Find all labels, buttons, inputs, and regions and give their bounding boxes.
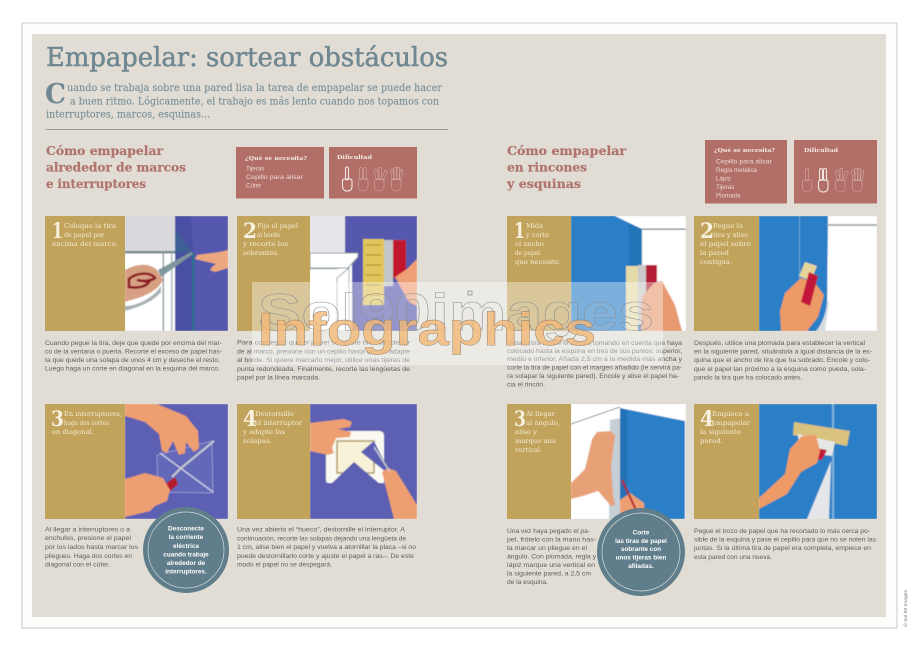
step 4 right: gold label: pared. — [700, 437, 723, 445]
step 1 left: gold label: Coloque la tira — [64, 222, 116, 230]
step 2 left: gold label — [237, 216, 310, 331]
body text step 3 right: la siguiente pared, a 2,5 cm — [507, 570, 591, 578]
intro text — [45, 79, 443, 120]
watermark: Sol90images / Infographics: Sol90images — [258, 284, 654, 342]
body text step 3 right: ta marcar un pliegue en el — [507, 545, 587, 552]
step 2 right: gold label: 2 — [700, 218, 714, 243]
step 1 right: gold label: que necesite. — [515, 258, 561, 266]
box: qué se necesita, izquierda: Cúter — [246, 182, 261, 190]
step 4 left: gold label: solapas. — [243, 437, 272, 445]
step 4 left: gold label — [237, 404, 310, 519]
body text step 2 left: Para conseguir que el papel se ajuste bien alrededor — [237, 340, 411, 346]
intro text: interruptores, marcos, esquinas... — [46, 108, 210, 120]
body text step 3 right — [507, 528, 597, 586]
body text step 4 left: continuación, recorte las solapas dejando una lengüeta de — [237, 536, 406, 542]
step 2 left: gold label: al borde — [257, 231, 280, 239]
drop cap: C — [45, 79, 66, 110]
heading: rincones y esquinas: en rincones — [507, 160, 587, 174]
body text step 2 right: quina que el ancho de tira que ha sobrado. Encole y colo- — [694, 357, 870, 364]
heading: marcos e interruptores — [46, 143, 186, 191]
body text step 2 left: papel por la línea marcada. — [237, 374, 320, 382]
step 3 left: gold label: en diagonal. — [52, 428, 94, 436]
box: dificultad, izquierda — [329, 147, 417, 198]
body text step 1 right: corte la tira de papel con el margen añadido (le servirá pa- — [507, 364, 682, 372]
step 3 right: gold label: al ángulo, — [526, 419, 560, 427]
body text step 2 left: al borde. Si quiere marcarlo mejor, utilice unas tijeras de — [237, 357, 410, 364]
step 2 right: gold label: Pegue la — [713, 222, 743, 230]
body text step 3 right: Una vez haya pegado el pa- — [507, 528, 590, 535]
illustration: brush on blue wallpaper in corner — [571, 216, 686, 331]
body text step 1 right: ra solapar la siguiente pared). Encole y alise el papel ha- — [507, 373, 679, 380]
step 4 right: gold label: empapelar — [712, 419, 751, 427]
body text step 2 right: que el papel tan próximo a la esquina como pueda, sola- — [694, 366, 866, 373]
illustration: cutting paper over frame with scissors — [125, 216, 228, 331]
body text step 2 left: de al marco, presione con un cepillo hasta que se adapte — [237, 348, 410, 356]
step 4 left: gold label: el interruptor — [255, 419, 303, 427]
body text step 1 right: colocado hasta la esquina en tres de sus puntos: superior, — [507, 348, 682, 355]
step 2 left: gold label: Fije el papel — [257, 222, 298, 230]
body text step 4 right: sible de la esquina y pase el cepillo para que no se noten las — [694, 536, 876, 544]
step 1 right: gold label: y corte — [525, 231, 549, 239]
step 1 left: gold label: 1 — [52, 218, 63, 243]
step 1 right: gold label: Mida — [526, 222, 543, 230]
icon: hands difficulty 1 of 4 — [342, 167, 403, 191]
body text step 1 right: Mida la tira desde el rincón, tomando en cuenta que haya — [507, 340, 682, 347]
step 3 left: gold label: En interruptores, — [64, 410, 122, 418]
step 1 right: gold label — [507, 216, 571, 331]
illustration: starting next wall with brush — [759, 404, 877, 519]
heading: rincones y esquinas: y esquinas — [506, 176, 581, 191]
step 3 right: gold label: 3 — [514, 406, 526, 431]
body text step 3 right: pel, frótelo con la mano has- — [507, 536, 596, 544]
body text step 1 left: Cuando pegue la tira, deje que quede por encima del mar- — [45, 340, 222, 347]
step 2 right: gold label: la pared — [700, 249, 730, 257]
step 2 left: gold label: y recorte los — [242, 240, 289, 248]
title: Empapelar: sortear obstáculos — [46, 42, 448, 73]
callout: desconecte la corriente: cuando trabaje — [163, 552, 209, 558]
body text step 3 left — [45, 526, 138, 568]
step 3 right: gold label: alise y — [515, 428, 537, 436]
callout: corte las tiras — [597, 508, 685, 596]
body text step 2 right: Después, utilice una plomada para establecer la vertical — [694, 340, 865, 347]
body text step 2 left — [237, 340, 411, 382]
step 1 left: gold label: encima del marco. — [52, 240, 118, 248]
icon: hands difficulty 2 of 4 — [802, 168, 864, 192]
step 3 left: gold label: haga dos cortes — [64, 419, 110, 427]
box: qué se necesita, derecha: ¿Qué se necesita? — [714, 147, 775, 154]
box: qué se necesita, derecha: Cepillo para alisar — [716, 158, 772, 166]
intro text: a buen ritmo. Lógicamente, el trabajo es más lento cuando nos topamos con — [70, 96, 439, 108]
step 3 left: gold label: 3 — [51, 406, 64, 431]
heading: marcos e interruptores: Cómo empapelar — [46, 143, 163, 158]
step 2 right: gold label: el papel sobre — [700, 240, 751, 248]
illustration: diagonal cuts in switch area — [125, 404, 228, 519]
body text step 1 right: medio e inferior. Añada 2,5 cm a la medida más ancha y — [507, 356, 683, 363]
body text step 3 left: diagonal con el cúter. — [45, 562, 110, 568]
heading: rincones y esquinas: Cómo empapelar — [507, 143, 626, 158]
step 2 right: gold label: contigua. — [700, 258, 732, 266]
box: qué se necesita, izquierda: Tijeras — [246, 166, 264, 172]
body text step 4 left: puede destornillarlo corte y ajuste el papel a ras–. De este — [237, 553, 414, 560]
step 3 right: gold label: Al llegar — [525, 410, 556, 418]
box: qué se necesita, derecha: Lápiz — [716, 176, 731, 182]
callout: corte las tiras: sobrante con — [621, 546, 661, 553]
box: dificultad, derecha — [794, 140, 877, 204]
callout: corte las tiras: las tiras de papel — [615, 538, 667, 545]
step 1 right: gold label: de papel — [515, 249, 540, 257]
step 1 left: gold label: de papel por — [64, 231, 105, 239]
illustration: unscrewing switch plate and adapting flaps — [310, 404, 417, 519]
box: qué se necesita, izquierda: Cepillo para alisar — [246, 174, 303, 181]
body text step 3 right: ángulo. Con plomada, regla y — [507, 554, 597, 560]
callout: corte las tiras: Corte — [633, 530, 650, 536]
body text step 4 left: Una vez abierto el “hueco”, destornille el interruptor. A — [237, 526, 406, 534]
step 2 right: gold label — [694, 216, 759, 331]
heading: marcos e interruptores: alrededor de marcos — [46, 160, 186, 174]
step 4 right: gold label: Empiece a — [712, 410, 749, 418]
body text step 3 left: pliegues. Haga dos cortes en — [45, 553, 132, 560]
step 4 right: gold label — [694, 404, 759, 519]
watermark: Sol90images / Infographics — [252, 282, 663, 365]
body text step 3 left: enchufes, presione el papel — [45, 535, 131, 542]
heading: marcos e interruptores: e interruptores — [46, 176, 146, 191]
body text step 4 right — [693, 528, 876, 561]
body text step 2 right: en la siguiente pared, situándola a igual distancia de la es- — [694, 348, 872, 356]
body text step 1 right: cia el rincón. — [507, 382, 545, 388]
callout: desconecte la corriente: eléctrica — [173, 543, 199, 550]
step 4 left: gold label: 4 — [243, 406, 257, 431]
box: qué se necesita, derecha: Plomada — [716, 192, 741, 200]
body text step 4 right: Pegue el trozo de papel que ha recortado lo más cerca po- — [694, 528, 870, 535]
intro text: uando se trabaja sobre una pared lisa la tarea de empapelar se puede hacer — [67, 82, 443, 94]
box: dificultad, derecha: Dificultad — [804, 148, 838, 154]
body text step 1 left: ta que quede una solapa de unos 4 cm y deseche el resto. — [45, 357, 220, 364]
watermark: Sol90images / Infographics: Infographics — [258, 303, 596, 355]
step 3 right: gold label — [507, 404, 571, 519]
step 3 right: gold label: vertical. — [514, 446, 542, 454]
body text step 3 right: lápiz marque una vertical en — [507, 562, 595, 569]
box: qué se necesita, izquierda: ¿Qué se necesita? — [245, 155, 307, 162]
copyright note: © Sol 90 Images — [902, 589, 908, 627]
step 1 right: gold label: 1 — [514, 218, 525, 243]
illustration: brush fixing paper at frame edge — [310, 216, 417, 331]
box: dificultad, izquierda: Dificultad — [337, 155, 372, 161]
body text step 4 right: juntas. Si la última tira de papel era completa, empiece en — [693, 545, 871, 552]
body text step 4 right: esta pared con una nueva. — [694, 554, 772, 561]
callout: desconecte la corriente: Desconecte — [168, 526, 204, 532]
body text step 3 left: Al llegar a interruptores o a — [45, 526, 130, 534]
illustration: marking vertical at corner — [571, 404, 686, 519]
body text step 1 right — [507, 340, 683, 388]
heading: rincones y esquinas — [506, 143, 626, 191]
body text step 2 right: pando la tira que ha colocado antes. — [694, 374, 802, 382]
step 1 right: gold label: el ancho — [515, 240, 544, 248]
body text step 1 left: co de la ventana o puerta. Recorte el exceso de papel has- — [45, 348, 222, 356]
body text step 1 left: Luego haga un corte en diagonal en la esquina del marco. — [45, 366, 220, 372]
step 4 right: gold label: la siguiente — [700, 428, 741, 436]
body text step 4 left: 1 cm, alise bien el papel y vuelva a atornillar la placa –si no — [237, 544, 416, 551]
illustration: hand smoothing paper with brush — [759, 216, 877, 331]
body text step 3 left: por los lados hasta marcar los — [45, 544, 138, 551]
body text step 2 right — [694, 340, 872, 382]
callout: desconecte la corriente: alrededor de — [167, 560, 206, 567]
step 2 left: gold label: 2 — [243, 218, 257, 243]
body text step 3 right: de la esquina. — [507, 579, 548, 586]
step 4 right: gold label: 4 — [700, 406, 714, 431]
box: qué se necesita, derecha — [705, 140, 787, 204]
step 3 right: gold label: marque una — [515, 437, 556, 445]
box: qué se necesita, derecha: Tijeras — [716, 184, 734, 191]
callout: desconecte la corriente: la corriente — [169, 534, 204, 541]
step 1 left: gold label — [45, 216, 125, 331]
box: qué se necesita, derecha: Regla metálica — [716, 167, 757, 174]
body text step 2 left: punta redondeada. Finalmente, recorte las lengüetas de — [237, 366, 410, 373]
callout: desconecte la corriente: interruptores. — [165, 568, 207, 576]
callout: corte las tiras: afiladas. — [628, 563, 654, 570]
step 2 left: gold label: sobrantes. — [243, 249, 279, 257]
step 4 left: gold label: y adapte las — [242, 428, 286, 436]
step 2 right: gold label: tira y alise — [713, 231, 748, 239]
callout: desconecte la corriente — [143, 507, 229, 593]
body text step 4 left: modo el papel no se despegará. — [237, 562, 332, 568]
step 3 left: gold label — [45, 404, 125, 519]
step 4 left: gold label: Destornille — [255, 410, 294, 418]
box: qué se necesita, izquierda — [236, 147, 324, 198]
callout: corte las tiras: unos tijeras bien — [616, 554, 666, 562]
body text step 1 left — [45, 340, 222, 372]
body text step 4 left — [237, 526, 416, 568]
